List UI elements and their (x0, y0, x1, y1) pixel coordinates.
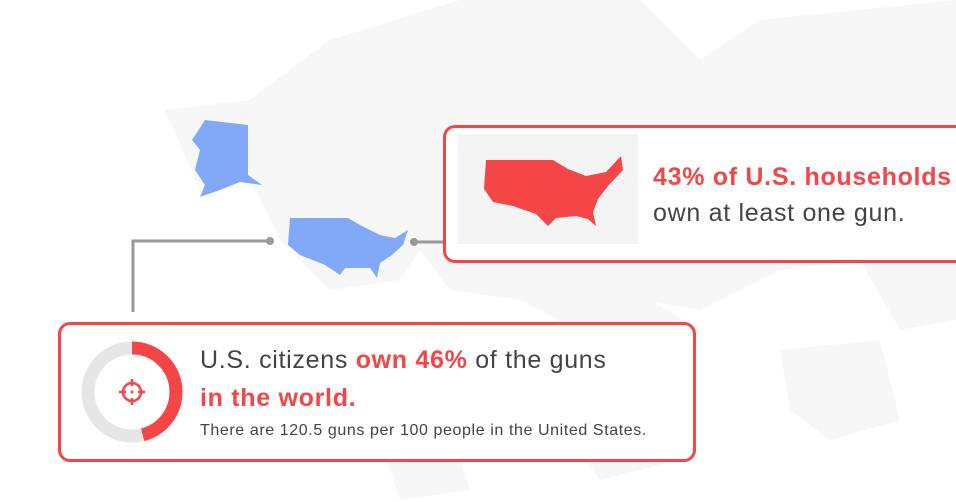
text: guns per 100: There are 120.5 guns per 100 people in the United States. (200, 422, 647, 439)
panel: world share (58, 322, 696, 462)
text: world share: U.S. citizens own 46% of the guns (200, 346, 607, 374)
icon: crosshair (119, 379, 145, 405)
text: world share (200, 346, 607, 412)
text: households stat (653, 163, 952, 227)
text: world share: in the world. (200, 384, 356, 412)
text: households stat: own at least one gun. (653, 199, 905, 227)
text: households stat: 43% of U.S. households (653, 163, 952, 191)
map: red US (458, 134, 638, 244)
donut chart 46% (82, 342, 182, 442)
panel: households (443, 125, 956, 263)
